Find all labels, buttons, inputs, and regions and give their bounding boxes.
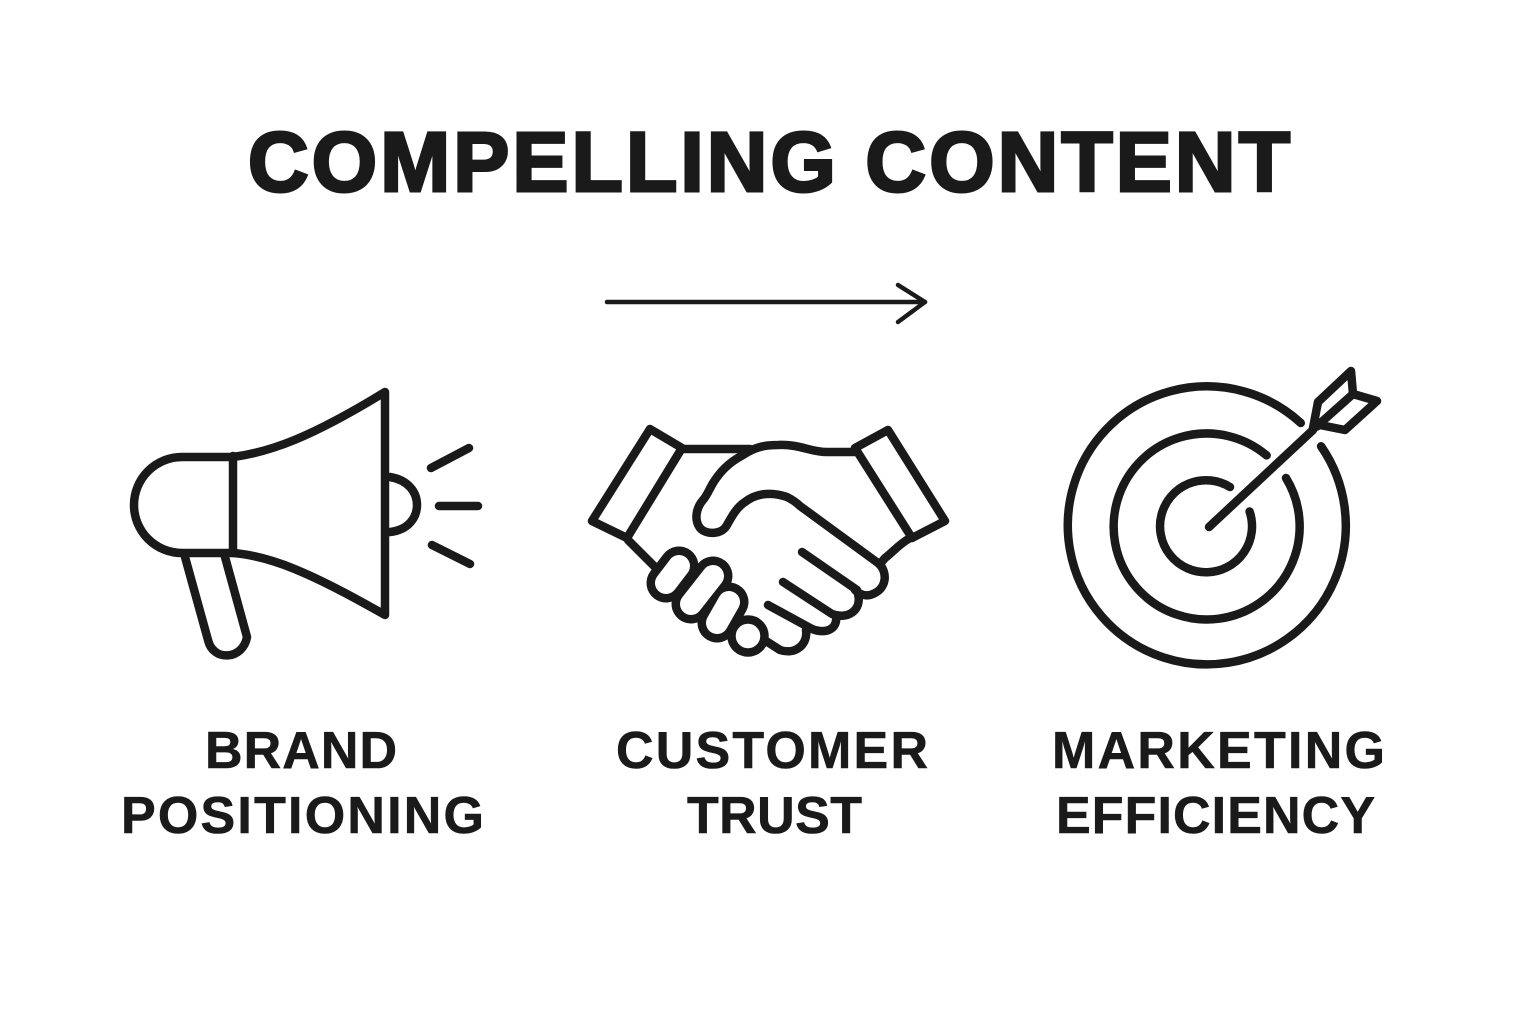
label: customer trust: CUSTOMER xyxy=(616,722,928,780)
label: brand positioning: POSITIONING xyxy=(121,787,484,845)
title: COMPELLING CONTENT xyxy=(248,115,1290,209)
arrow: progression xyxy=(607,285,925,322)
label: marketing efficiency: EFFICIENCY xyxy=(1056,787,1375,845)
icon: handshake xyxy=(592,429,945,652)
label: brand positioning xyxy=(121,722,484,845)
icon: megaphone xyxy=(134,392,478,655)
label: brand positioning: BRAND xyxy=(205,722,397,780)
left hand fingers xyxy=(666,566,764,652)
label: customer trust xyxy=(616,722,928,845)
label: customer trust: TRUST xyxy=(687,787,862,845)
icon: target with arrow xyxy=(1068,371,1377,664)
label: marketing efficiency xyxy=(1052,722,1385,845)
label: marketing efficiency: MARKETING xyxy=(1052,722,1385,780)
